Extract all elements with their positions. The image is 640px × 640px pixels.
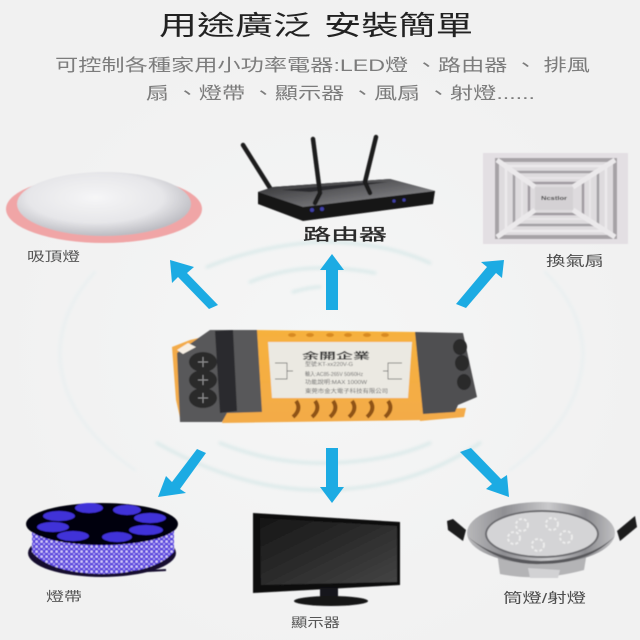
icon: LED strip reel [26,503,178,577]
arrow: to monitor [320,448,344,503]
arrow: to LED strip [158,449,206,497]
icon: relay module: 功能說明:MAX 1000W [305,378,368,386]
title: 安裝簡單 [324,11,473,41]
icon: router [243,137,435,221]
arrow: to downlight [460,448,509,497]
icon: monitor [253,513,400,606]
icon: relay module: 余開企業 [302,350,370,361]
icon: ceiling light [6,172,202,243]
label: ceiling light: 吸頂燈 [27,249,80,264]
title: 用途廣泛 [159,11,311,41]
icon: relay module: 型號:KT-xx220V-G [305,360,353,368]
icon: relay module: 東莞市金大電子科技有限公司 [305,387,388,395]
label: downlight: 筒燈/射燈 [503,590,586,606]
subtitle [55,56,590,103]
subtitle: 扇 、燈帶 、顯示器 、風扇 、射燈...... [146,84,535,103]
arrow: to router [320,254,344,310]
subtitle: 可控制各種家用小功率電器:LED燈 、路由器 、 排風 [55,56,590,75]
title [159,11,473,41]
icon: downlight [447,502,637,578]
label: ventilation fan: 換氣扇 [546,253,604,269]
label: LED strip: 燈帶 [46,589,82,604]
arrow: to fan [456,260,504,308]
arrow: to ceiling light [170,260,218,309]
background signal arcs [60,242,583,490]
icon: ventilation fan [483,153,628,244]
icon: relay module: 輸入:AC85-265V 50/60Hz [305,370,363,378]
icon: relay module [172,330,477,423]
label: router: 路由器 [303,226,387,244]
icon: ventilation fan: Ncstlor [541,196,567,202]
label: monitor: 顯示器 [291,615,340,630]
